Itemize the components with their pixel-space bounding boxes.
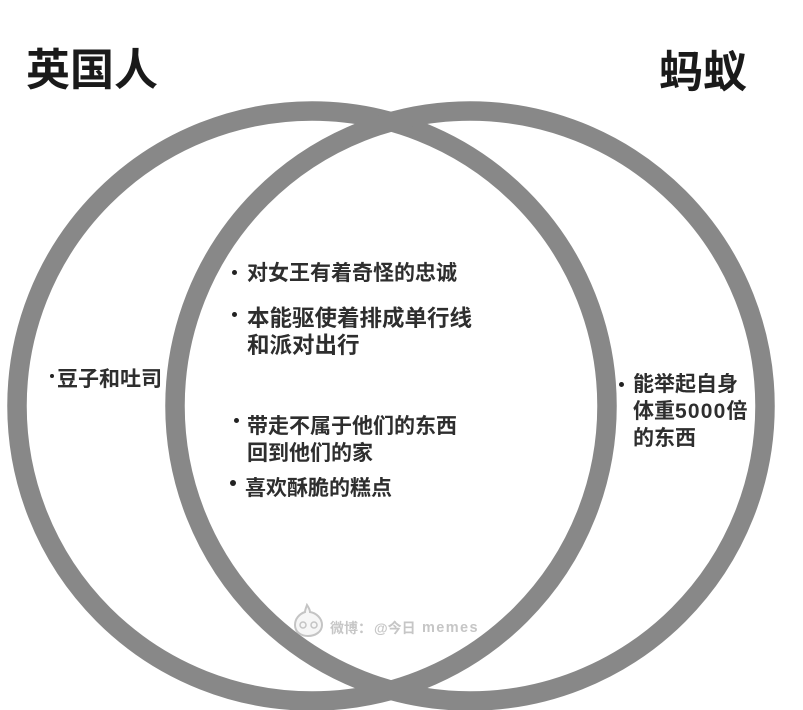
heading: British: 英国人 — [26, 46, 158, 95]
icon: watermark bird — [294, 603, 323, 637]
overlap item: instinct to queue: 本能驱使着排成单行线 — [247, 306, 472, 331]
watermark text: memes — [422, 620, 479, 636]
left circle text: beans and toast: 豆子和吐司 — [57, 368, 162, 391]
overlap item: taking things home — [234, 414, 457, 465]
overlap item: crispy pastries: 喜欢酥脆的糕点 — [245, 477, 392, 500]
overlap item: loyalty to queen: 对女王有着奇怪的忠诚 — [247, 262, 457, 285]
overlap item: taking things home: 回到他们的家 — [247, 442, 373, 465]
watermark text: 微博： — [330, 620, 372, 636]
right circle text: lift 5000 times body weight — [619, 373, 748, 450]
heading: ants: 蚂蚁 — [659, 48, 747, 97]
right circle text: lift 5000 times body weight: 体重5000倍 — [633, 400, 748, 423]
watermark text: @今日 — [374, 620, 416, 636]
watermark — [294, 603, 479, 637]
right circle text: lift 5000 times body weight: 能举起自身 — [633, 373, 738, 396]
overlap item: instinct to queue: 和派对出行 — [247, 333, 360, 358]
overlap item: taking things home: 带走不属于他们的东西 — [247, 415, 457, 438]
watermark text — [330, 620, 479, 636]
right circle text: lift 5000 times body weight: 的东西 — [633, 427, 696, 450]
overlap item: instinct to queue — [232, 306, 472, 358]
